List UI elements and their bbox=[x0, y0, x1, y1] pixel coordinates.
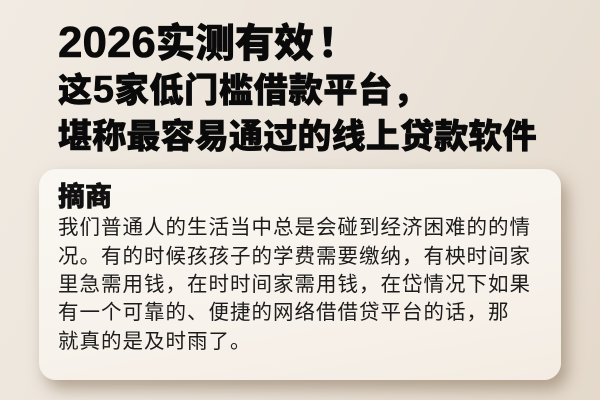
abstract line 5: 就真的是及时雨了。 bbox=[58, 330, 252, 353]
title line 2: 这5家低门槛借款平台， bbox=[58, 69, 428, 111]
title line 3: 堪称最容易通过的线上贷款软件 bbox=[58, 118, 537, 156]
abstract line 1: 我们普通人的生活当中总是会碰到经济困难的的情 bbox=[58, 216, 531, 239]
abstract heading: 摘商 bbox=[58, 182, 112, 212]
title line 1: 2026实测有效！ bbox=[58, 18, 357, 67]
abstract line 2: 况。有的时候孩孩子的学费需要缴纳，有柍时间家 bbox=[58, 245, 531, 268]
title bbox=[58, 18, 537, 156]
panel: abstract card bbox=[39, 169, 561, 380]
abstract line 4: 有一个可靠的、便捷的网络借借贷平台的话，那 bbox=[58, 301, 510, 324]
abstract line 3: 里急需用钱，在时时间家需用钱，在岱情况下如果 bbox=[58, 273, 531, 296]
